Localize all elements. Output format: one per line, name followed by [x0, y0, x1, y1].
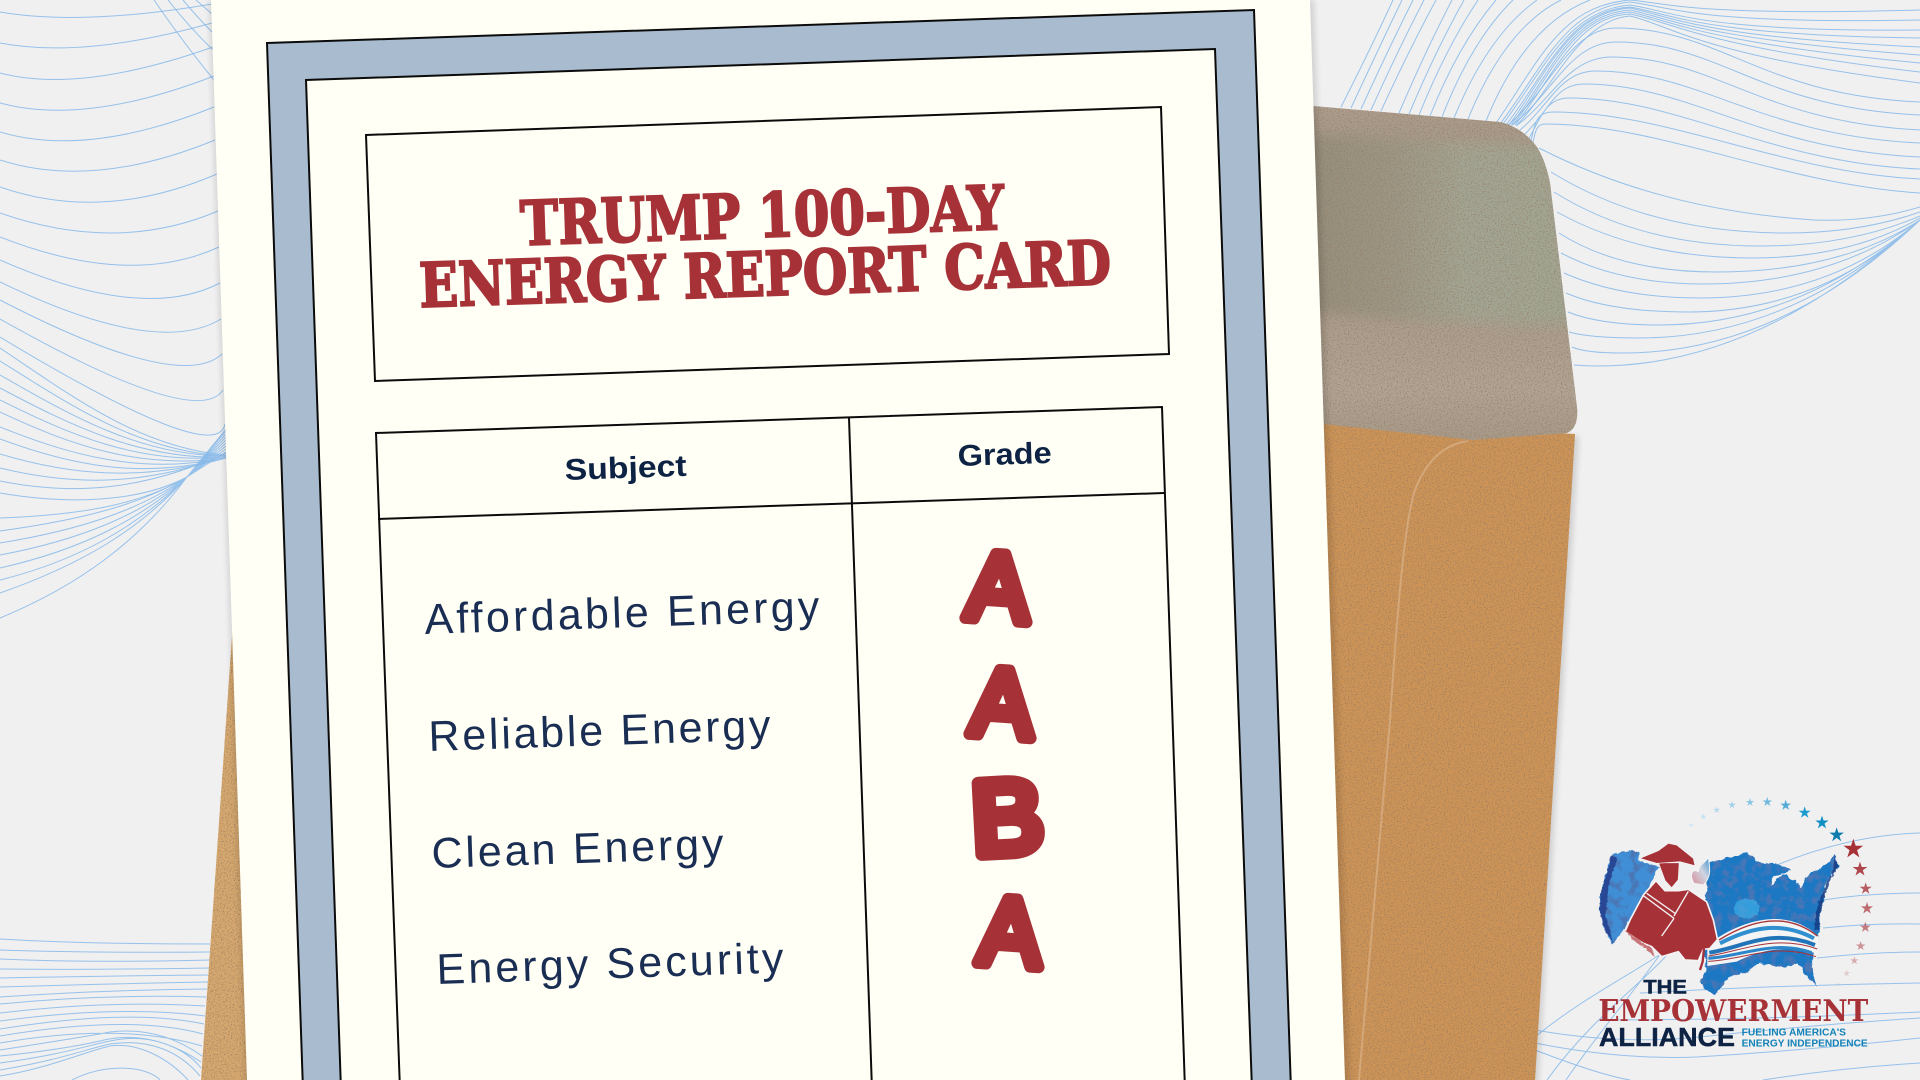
logo map dark east coast: [1814, 854, 1838, 930]
envelope: [201, 106, 1579, 1080]
table header: grade: Grade: [957, 437, 1052, 473]
handwritten grades: B: [968, 758, 1046, 877]
subject rows: Reliable Energy: [428, 702, 772, 761]
subject rows: [424, 583, 821, 994]
subject rows: Affordable Energy: [424, 583, 821, 644]
logo wordmark: EMPOWERMENT: [1598, 994, 1868, 1029]
soldier streaks: [1625, 930, 1654, 957]
logo wordmark: ALLIANCE: [1599, 1024, 1735, 1052]
grade table: [376, 407, 1185, 1080]
logo wordmark: FUELING AMERICA'S: [1742, 1027, 1846, 1038]
envelope flap: [1300, 106, 1577, 440]
envelope left tab: [201, 622, 252, 1080]
title: TRUMP 100-DAY: [519, 173, 1006, 260]
logo flame: [1691, 857, 1710, 885]
soldier collar and belts: [1643, 891, 1688, 936]
handwritten grades: A: [968, 648, 1037, 759]
handwritten grades: [964, 532, 1046, 988]
envelope seam: [1359, 441, 1468, 1080]
soldier head: [1658, 863, 1679, 888]
logo map light patch: [1734, 898, 1759, 918]
blue frame: [267, 10, 1291, 1080]
table header: subject: Subject: [564, 450, 687, 487]
logo US map: [1599, 850, 1838, 994]
soldier body: [1625, 881, 1718, 961]
subject rows: Clean Energy: [431, 820, 725, 878]
report card paper: [211, 0, 1345, 1080]
soldier tricorn hat: [1640, 843, 1695, 866]
envelope shadow: [1320, 420, 1579, 1080]
logo wordmark: ENERGY INDEPENDENCE: [1742, 1039, 1868, 1050]
subject rows: Energy Security: [436, 934, 785, 994]
envelope body: [1320, 420, 1575, 1080]
logo soldier: [1625, 843, 1718, 961]
title: ENERGY REPORT CARD: [418, 228, 1112, 322]
title: [418, 173, 1112, 322]
logo flag stripes: [1700, 919, 1819, 970]
logo wordmark: THE: [1643, 977, 1687, 998]
paper shadow: [209, 0, 1350, 1080]
handwritten grades: A: [976, 877, 1045, 988]
logo map west coast dark: [1599, 855, 1617, 943]
logo wordmark: [1598, 977, 1868, 1052]
logo: The Empowerment Alliance: [1598, 797, 1873, 1052]
logo stars arc: [1680, 797, 1873, 986]
title box: [366, 107, 1169, 381]
handwritten grades: A: [964, 532, 1033, 643]
